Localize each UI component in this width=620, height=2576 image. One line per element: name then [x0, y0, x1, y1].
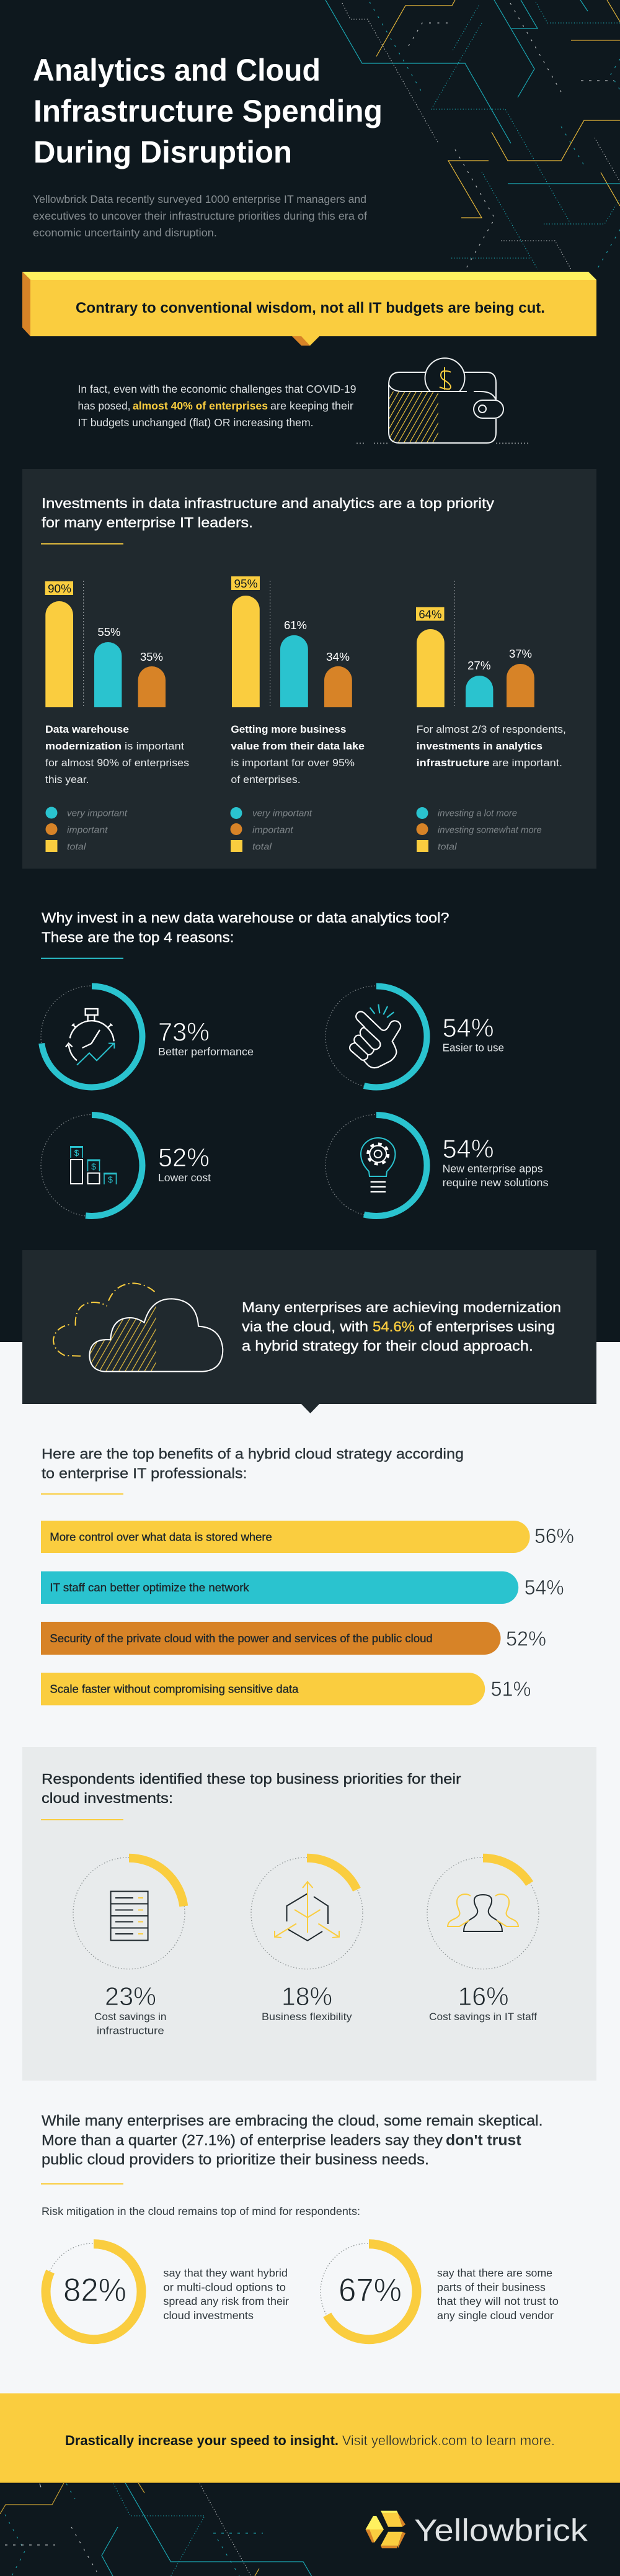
heading: reasons: These are the top 4 reasons: — [42, 929, 234, 946]
icon: server rack — [111, 1891, 148, 1941]
icon: descending cost bars: $ — [74, 1148, 79, 1158]
description: that they will not trust to — [437, 2295, 559, 2307]
heading — [42, 495, 495, 530]
stat: 67% single vendor — [321, 2243, 559, 2340]
panel: business priorities — [22, 1747, 596, 2081]
wallet paragraph: are keeping their — [270, 400, 353, 412]
panel: hybrid cloud callout — [22, 1250, 596, 1413]
icon: descending cost bars — [70, 1147, 117, 1184]
bar chart 3: 64% — [418, 608, 441, 620]
stat: 16% IT staff — [427, 1858, 539, 2023]
legend 1: important — [67, 825, 108, 835]
bar: scale faster: Scale faster without compromising sensitive data — [50, 1683, 299, 1696]
description — [163, 2267, 289, 2322]
stat: 54% new enterprise apps: 54% — [443, 1134, 494, 1163]
stat: 16% IT staff: 16% — [458, 1982, 508, 2011]
heading: hybrid benefits — [42, 1446, 464, 1482]
bar: scale faster — [41, 1673, 531, 1705]
legend 2: very important — [252, 808, 312, 819]
heading: cloud skepticism: public cloud providers to prioritize their business needs. — [42, 2152, 429, 2168]
stat: 23% infrastructure: 23% — [105, 1982, 156, 2011]
intro text: executives to uncover their infrastructure priorities during this era of — [33, 210, 367, 222]
footer background — [0, 2483, 620, 2576]
heading: cloud skepticism: More than a quarter (27.1%) of enterprise leaders say they — [42, 2132, 443, 2149]
bar chart 3 — [416, 581, 534, 707]
description: spread any risk from their — [163, 2295, 289, 2307]
wallet paragraph: has posed, — [78, 400, 130, 412]
icon: stopwatch — [66, 1009, 114, 1065]
description: parts of their business — [437, 2281, 546, 2294]
panel: data infrastructure investments — [22, 469, 596, 869]
stat: 23% infrastructure: Cost savings in — [94, 2011, 166, 2023]
legend 1: total — [67, 841, 86, 852]
intro text: economic uncertainty and disruption. — [33, 226, 217, 239]
wallet paragraph: In fact, even with the economic challenges that COVID-19 — [78, 383, 356, 395]
description 1 — [45, 723, 189, 785]
legend 2 — [231, 807, 312, 852]
callout banner — [22, 272, 596, 346]
legend 1 — [46, 807, 128, 852]
heading: cloud skepticism: While many enterprises are embracing the cloud, some remain skeptical. — [42, 2113, 543, 2129]
legend 2: total — [252, 841, 272, 852]
bar chart 3: 27% — [467, 659, 491, 672]
heading: reasons: Why invest in a new data warehouse or data analytics tool? — [42, 910, 449, 926]
background: light middle — [0, 1342, 620, 2394]
bar chart 1: 35% — [140, 650, 163, 663]
description 2 — [231, 723, 365, 785]
callout text: Many enterprises are achieving modernization — [242, 1299, 561, 1315]
heading: cloud skepticism: don't trust — [446, 2132, 521, 2149]
description 1: Data warehouse — [45, 723, 129, 735]
description 1: for almost 90% of enterprises — [45, 757, 189, 769]
title: During Disruption — [33, 135, 292, 169]
legend 3: investing somewhat more — [438, 825, 542, 835]
stat: 54% easier to use: Easier to use — [443, 1042, 504, 1054]
call to action band — [0, 2394, 620, 2483]
header circuit pattern — [326, 0, 620, 269]
stat: 73% better performance — [41, 986, 254, 1088]
bar: optimize network: 54% — [525, 1576, 564, 1599]
bar: more control: 56% — [534, 1524, 574, 1547]
stat: 54% new enterprise apps: New enterprise apps — [443, 1163, 543, 1175]
icon: light bulb with gear — [361, 1138, 396, 1192]
bar: scale faster: 51% — [491, 1678, 531, 1701]
description 2: value from their data lake — [231, 740, 365, 752]
stat: 54% new enterprise apps: require new solutions — [443, 1176, 549, 1189]
stat: 73% better performance: 73% — [158, 1017, 210, 1047]
bar chart 3: 37% — [509, 647, 532, 660]
stat: 54% easier to use: 54% — [443, 1013, 494, 1042]
description: or multi-cloud options to — [163, 2281, 286, 2294]
bar: optimize network — [41, 1572, 564, 1604]
wallet paragraph: almost 40% of enterprises — [133, 400, 268, 412]
callout text: via the cloud, with — [242, 1318, 368, 1335]
title: Infrastructure Spending — [33, 94, 383, 128]
description 2: is important for over 95% — [231, 757, 355, 769]
description: say that they want hybrid — [163, 2267, 288, 2279]
bar: more control — [41, 1521, 574, 1553]
bar: private cloud security: 52% — [506, 1627, 546, 1650]
stat: 82% multi-cloud: 82% — [63, 2272, 126, 2309]
bar chart 2 — [231, 576, 352, 707]
description 1: this year. — [45, 774, 89, 785]
bar chart 2: 95% — [234, 577, 258, 590]
stat: 23% infrastructure — [73, 1858, 185, 2036]
description: any single cloud vendor — [437, 2309, 554, 2322]
callout text — [242, 1299, 561, 1354]
footer circuit pattern — [0, 2483, 311, 2576]
description: say that there are some — [437, 2267, 552, 2279]
heading: hybrid benefits: to enterprise IT professionals: — [42, 1465, 247, 1482]
stat: 52% lower cost: 52% — [158, 1143, 210, 1172]
description 3: infrastructure — [417, 757, 490, 769]
wallet paragraph — [78, 383, 356, 429]
bar chart 2: 61% — [284, 619, 307, 632]
legend 2: important — [252, 825, 293, 835]
legend 1: very important — [67, 808, 128, 819]
description 3: For almost 2/3 of respondents, — [417, 723, 566, 735]
stat: 54% easier to use — [326, 986, 504, 1088]
stat: 52% lower cost — [41, 1114, 211, 1216]
heading: Investments in data infrastructure and analytics are a top priority — [42, 495, 495, 511]
heading — [42, 1771, 461, 1806]
icon: descending cost bars: $ — [108, 1174, 113, 1184]
bar chart 1 — [45, 581, 166, 707]
description 2: Getting more business — [231, 723, 346, 735]
call to action band: Drastically increase your speed to insight. — [65, 2433, 339, 2448]
icon: wallet — [356, 358, 529, 443]
icon: people — [448, 1894, 518, 1931]
description 3 — [417, 723, 566, 769]
heading: hybrid benefits: Here are the top benefits of a hybrid cloud strategy according — [42, 1446, 464, 1462]
intro text: Yellowbrick Data recently surveyed 1000 enterprise IT managers and — [33, 193, 366, 205]
stat: 82% multi-cloud — [45, 2243, 289, 2340]
bar: more control: More control over what data is stored where — [50, 1531, 272, 1544]
legend 3: total — [438, 841, 457, 852]
description 3: are important. — [492, 757, 562, 769]
description 1: is important — [125, 740, 184, 752]
stat: 18% flexibility: 18% — [281, 1982, 332, 2011]
heading: reasons — [42, 910, 449, 946]
bar: optimize network: IT staff can better optimize the network — [50, 1581, 250, 1594]
icon: finger snap hand — [350, 1004, 401, 1068]
bar chart 1: 55% — [98, 625, 120, 638]
background: dark top — [0, 0, 620, 1342]
heading: Respondents identified these top business priorities for their — [42, 1771, 461, 1787]
stat: 16% IT staff: Cost savings in IT staff — [429, 2011, 537, 2023]
call to action band: Visit yellowbrick.com to learn more. — [342, 2433, 555, 2448]
description 2: of enterprises. — [231, 774, 301, 785]
legend 3 — [417, 807, 542, 852]
logo mark — [366, 2511, 405, 2548]
icon: hexagon with arrows — [275, 1882, 339, 1941]
stat: 23% infrastructure: infrastructure — [97, 2025, 164, 2036]
stat: 18% flexibility: Business flexibility — [262, 2011, 352, 2023]
title — [33, 53, 383, 169]
icon: descending cost bars: $ — [91, 1161, 96, 1171]
bar chart 2: 34% — [326, 650, 350, 663]
bar: private cloud security — [41, 1622, 546, 1655]
wallet paragraph: IT budgets unchanged (flat) OR increasing them. — [78, 416, 314, 429]
stat: 73% better performance: Better performance — [158, 1045, 254, 1058]
stat: 52% lower cost: Lower cost — [158, 1171, 211, 1184]
stat: 54% new enterprise apps — [326, 1114, 549, 1216]
heading: cloud skepticism — [42, 2113, 543, 2168]
description — [437, 2267, 559, 2322]
callout text: 54.6% — [373, 1318, 415, 1335]
callout text: of enterprises using — [418, 1318, 555, 1335]
description 3: investments in analytics — [417, 740, 542, 752]
intro text — [33, 193, 367, 239]
legend 3: investing a lot more — [438, 808, 517, 819]
title: Analytics and Cloud — [33, 53, 321, 87]
icon: clouds — [53, 1283, 223, 1372]
risk mitigation intro: Risk mitigation in the cloud remains top of mind for respondents: — [42, 2205, 360, 2217]
logo: Yellowbrick — [366, 2511, 588, 2548]
description: cloud investments — [163, 2309, 254, 2322]
stat: 67% single vendor: 67% — [339, 2272, 402, 2309]
heading: cloud investments: — [42, 1790, 173, 1806]
logo: Yellowbrick: Yellowbrick — [414, 2513, 588, 2547]
stat: 18% flexibility — [251, 1858, 363, 2023]
banner text: Contrary to conventional wisdom, not all IT budgets are being cut. — [76, 300, 545, 316]
heading: for many enterprise IT leaders. — [42, 514, 253, 530]
bar chart 1: 90% — [48, 582, 71, 595]
callout text: a hybrid strategy for their cloud approach. — [242, 1338, 533, 1354]
description 1: modernization — [45, 740, 122, 752]
bar: private cloud security: Security of the private cloud with the power and services of the public cloud — [50, 1632, 433, 1645]
